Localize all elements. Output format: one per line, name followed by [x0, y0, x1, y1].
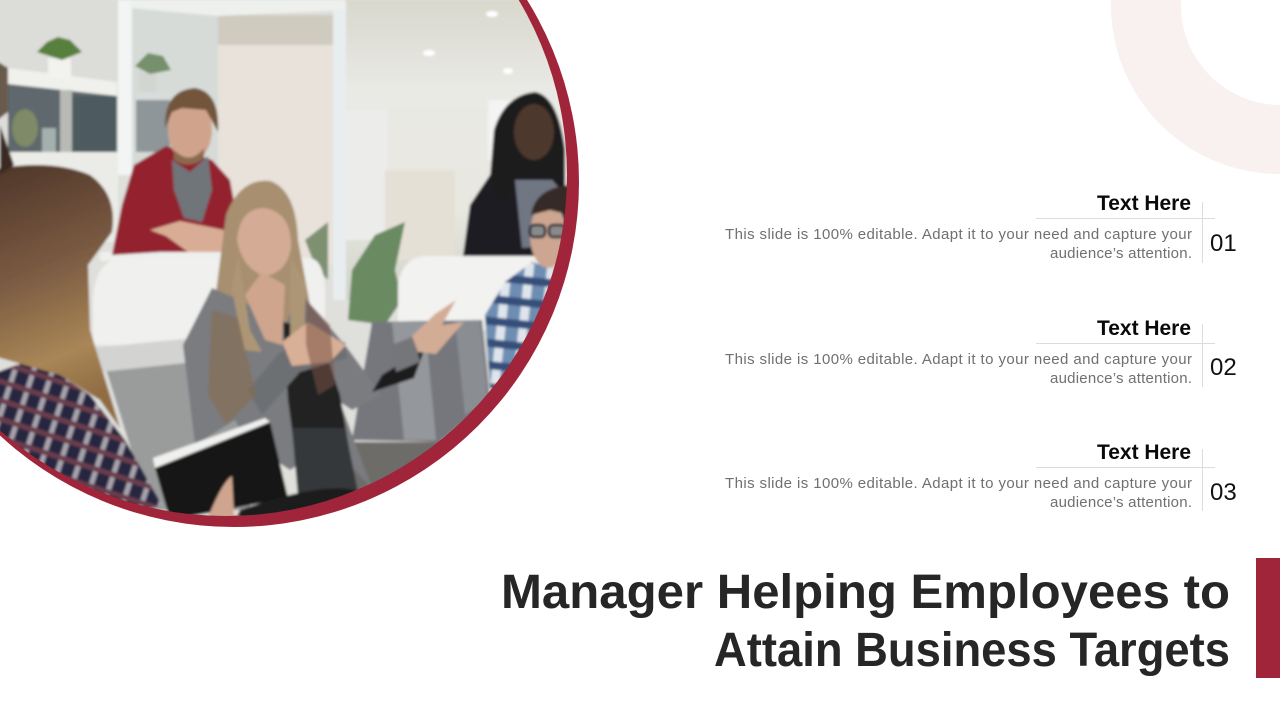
- title: [501, 566, 1230, 677]
- woman in black blazer: [463, 92, 570, 256]
- red ring: [0, 0, 579, 527]
- item 2 number: 02: [1210, 354, 1237, 381]
- title: Attain Business Targets: [714, 624, 1230, 677]
- item 2 description: This slide is 100% editable. Adapt it to your need and capture your: [725, 351, 1192, 368]
- item 3 heading: Text Here: [1097, 441, 1191, 464]
- shelves and plants: [0, 37, 171, 242]
- man in red sweater: [112, 88, 237, 255]
- woman from behind with plaid shirt: [0, 60, 162, 520]
- man with glasses in plaid shirt: [485, 185, 570, 392]
- central woman with patterned cardigan: [183, 181, 464, 497]
- item 2 description: audience’s attention.: [1050, 370, 1192, 387]
- item 2 heading: Text Here: [1097, 317, 1191, 340]
- black notebook in hands: [152, 416, 355, 516]
- item 3 dividers: [1036, 449, 1215, 511]
- item 1 description: This slide is 100% editable. Adapt it to your need and capture your: [725, 226, 1192, 243]
- red accent bar: [1256, 558, 1280, 678]
- item 1 dividers: [1036, 202, 1215, 263]
- circular photo with red ring: [0, 0, 610, 530]
- photo: team meeting: [0, 0, 610, 530]
- item 1 heading: Text Here: [1097, 192, 1191, 215]
- item 3 description: This slide is 100% editable. Adapt it to your need and capture your: [725, 475, 1192, 492]
- white and grey sofas: [93, 252, 540, 510]
- item 2: [725, 317, 1237, 387]
- item 3: [725, 441, 1237, 511]
- title: Manager Helping Employees to: [501, 566, 1230, 619]
- item 3 description: audience’s attention.: [1050, 494, 1192, 511]
- office background: [0, 0, 610, 530]
- item 3 number: 03: [1210, 479, 1237, 506]
- item 1 number: 01: [1210, 230, 1237, 257]
- item 1: [725, 192, 1237, 263]
- item 1 description: audience’s attention.: [1050, 245, 1192, 262]
- item 2 dividers: [1036, 324, 1215, 387]
- decorative arc: top-right corner: [1111, 0, 1280, 174]
